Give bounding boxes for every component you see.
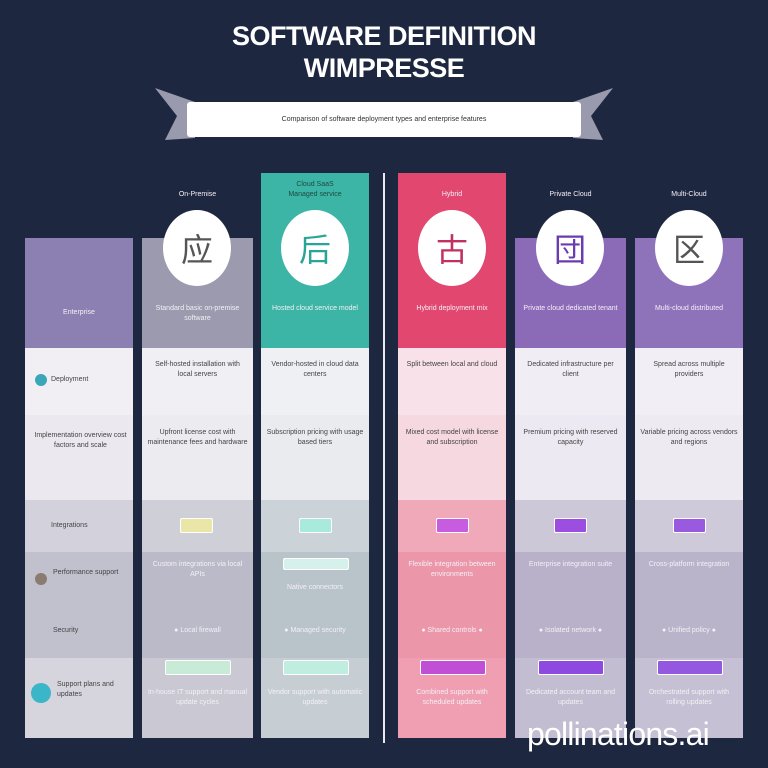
text: 区: [673, 225, 705, 271]
column 4 purple: Dedicated account team and updates: [526, 689, 615, 706]
text: 古: [436, 225, 468, 271]
column 0: labels: Enterprise: [63, 309, 95, 316]
text: ● Shared controls ●: [421, 627, 483, 634]
divider: [383, 173, 385, 743]
text: Vendor support with automatic updates: [268, 689, 362, 706]
column 4 purple: Enterprise integration suite: [529, 561, 612, 568]
column 5 purple: Cross-platform integration: [649, 561, 729, 568]
column 0: labels: Deployment: [51, 376, 88, 383]
column 0: labels: Security: [53, 627, 78, 634]
column 1 gray: Standard basic on-premise software: [156, 305, 239, 322]
column 0: labels: Integrations: [51, 522, 88, 529]
column 5 purple: Orchestrated support with rolling updates: [649, 689, 729, 706]
column 5 purple: Spread across multiple providers: [653, 361, 725, 378]
column 0: labels: Performance support: [53, 569, 118, 576]
column 1 gray: In-house IT support and manual update cycles: [148, 689, 247, 706]
column 4 purple: Private cloud dedicated tenant: [523, 305, 618, 312]
icon col1: [163, 210, 231, 286]
text: Multi-Cloud: [671, 191, 707, 198]
text: Subscription pricing with usage based tiers: [267, 429, 363, 446]
subtitle: [187, 102, 581, 137]
subtitle: Comparison of software deployment types and enterprise features: [282, 116, 486, 123]
text: Split between local and cloud: [407, 361, 497, 368]
column 1 gray: Self-hosted installation with local servers: [155, 361, 240, 378]
title: WIMPRESSE: [304, 53, 464, 83]
title: [232, 21, 536, 83]
text: Private Cloud: [549, 191, 592, 198]
column 5 purple: ● Unified policy ●: [662, 627, 716, 634]
column 1 gray: [142, 238, 253, 738]
column 4 purple: ● Isolated network ●: [539, 627, 602, 634]
column 0: labels: Support plans and updates: [57, 681, 114, 698]
column 0: labels: Implementation overview cost factors and scale: [34, 432, 127, 449]
column 1 gray: ● Local firewall: [174, 627, 221, 634]
column 2 teal: [261, 173, 369, 238]
text: Combined support with scheduled updates: [416, 689, 488, 706]
text: Native connectors: [287, 584, 343, 591]
text: 后: [299, 225, 331, 271]
text: Managed service: [288, 191, 342, 198]
text: Hybrid deployment mix: [416, 305, 488, 312]
title: SOFTWARE DEFINITION: [232, 21, 536, 51]
text: Flexible integration between environments: [408, 561, 496, 578]
ribbon banner: [155, 88, 613, 140]
column 5 purple: Multi-cloud distributed: [655, 305, 723, 312]
text: 団: [554, 225, 586, 271]
column 1 gray: Upfront license cost with maintenance fees and hardware: [147, 429, 248, 446]
icon col1: 应: [181, 225, 213, 271]
column 4 purple: Premium pricing with reserved capacity: [523, 429, 618, 446]
column 3 pink: [398, 173, 506, 238]
column 1 gray: Custom integrations via local APIs: [153, 561, 242, 578]
header label col1: On-Premise: [179, 191, 216, 198]
text: Mixed cost model with license and subscription: [406, 429, 498, 446]
text: ● Managed security: [284, 627, 346, 634]
text: Cloud SaaS: [296, 181, 334, 188]
column 4 purple: [515, 238, 626, 738]
text: Hybrid: [442, 191, 462, 198]
text: Vendor-hosted in cloud data centers: [271, 361, 359, 378]
column 5 purple: Variable pricing across vendors and regions: [640, 429, 738, 446]
column 0: labels: [25, 238, 133, 738]
column 4 purple: Dedicated infrastructure per client: [527, 361, 614, 378]
watermark: pollinations.ai: [527, 716, 709, 752]
text: Hosted cloud service model: [272, 305, 358, 312]
column 5 purple: [635, 238, 743, 738]
